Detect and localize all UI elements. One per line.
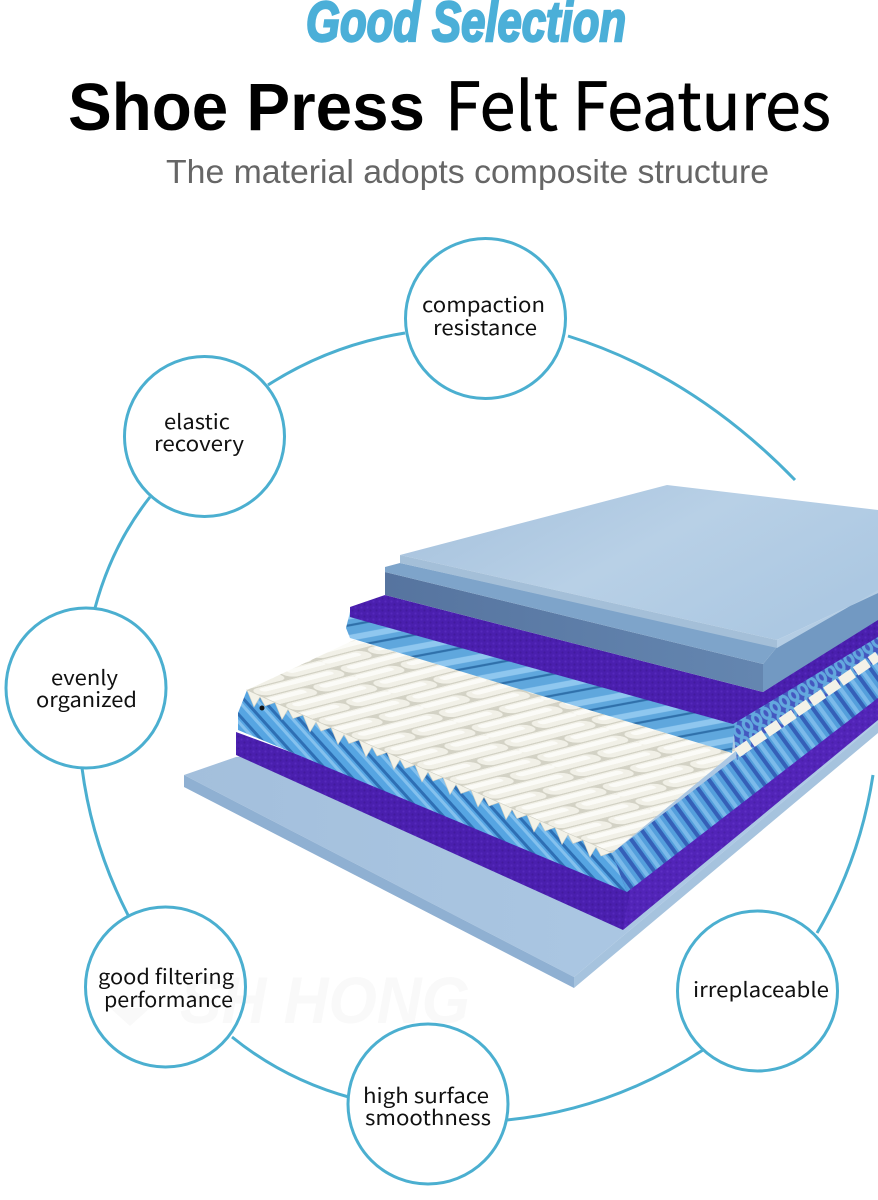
composite felt layers illustration [184, 485, 878, 988]
feature: good filtering performance [86, 907, 246, 1067]
layer: lower purple felt [236, 690, 878, 930]
feature: evenly organized [6, 608, 166, 768]
feature: high surface smoothness [348, 1024, 508, 1184]
layer: white woven mesh [247, 640, 878, 857]
title: Shoe Press Felt Features: Felt Features [445, 54, 831, 150]
feature: irreplaceable [678, 911, 838, 1071]
feature: good filtering performance: performance [104, 983, 233, 1013]
watermark: SH HONG [180, 963, 470, 1037]
feature: elastic recovery [124, 356, 284, 516]
layer: top light blue slab [400, 485, 878, 648]
feature: irreplaceable: irreplaceable [693, 973, 829, 1003]
layer: bottom slab [184, 690, 878, 988]
feature: high surface smoothness: smoothness [365, 1101, 491, 1131]
feature: good filtering performance: good filtering [98, 960, 234, 990]
title: Shoe Press Felt Features: Shoe Press [68, 70, 425, 145]
layer: upper purple felt [350, 595, 878, 724]
layer: blue rods [238, 635, 878, 892]
feature: high surface smoothness: high surface [363, 1079, 489, 1109]
feature: evenly organized: organized [36, 683, 137, 713]
title: Shoe Press Felt Features [68, 54, 831, 150]
feature: compaction resistance: resistance [433, 311, 537, 341]
feature: elastic recovery: recovery [154, 427, 244, 457]
feature: compaction resistance [406, 238, 566, 398]
subtitle: The material adopts composite structure [166, 153, 769, 190]
feature: elastic recovery: elastic [164, 405, 230, 435]
feature: compaction resistance: compaction [422, 288, 545, 318]
layer: twisted rope [346, 612, 735, 753]
connecting ring arcs [82, 333, 873, 1120]
feature: evenly organized: evenly [51, 661, 118, 691]
layer: dark blue slab [385, 563, 878, 692]
